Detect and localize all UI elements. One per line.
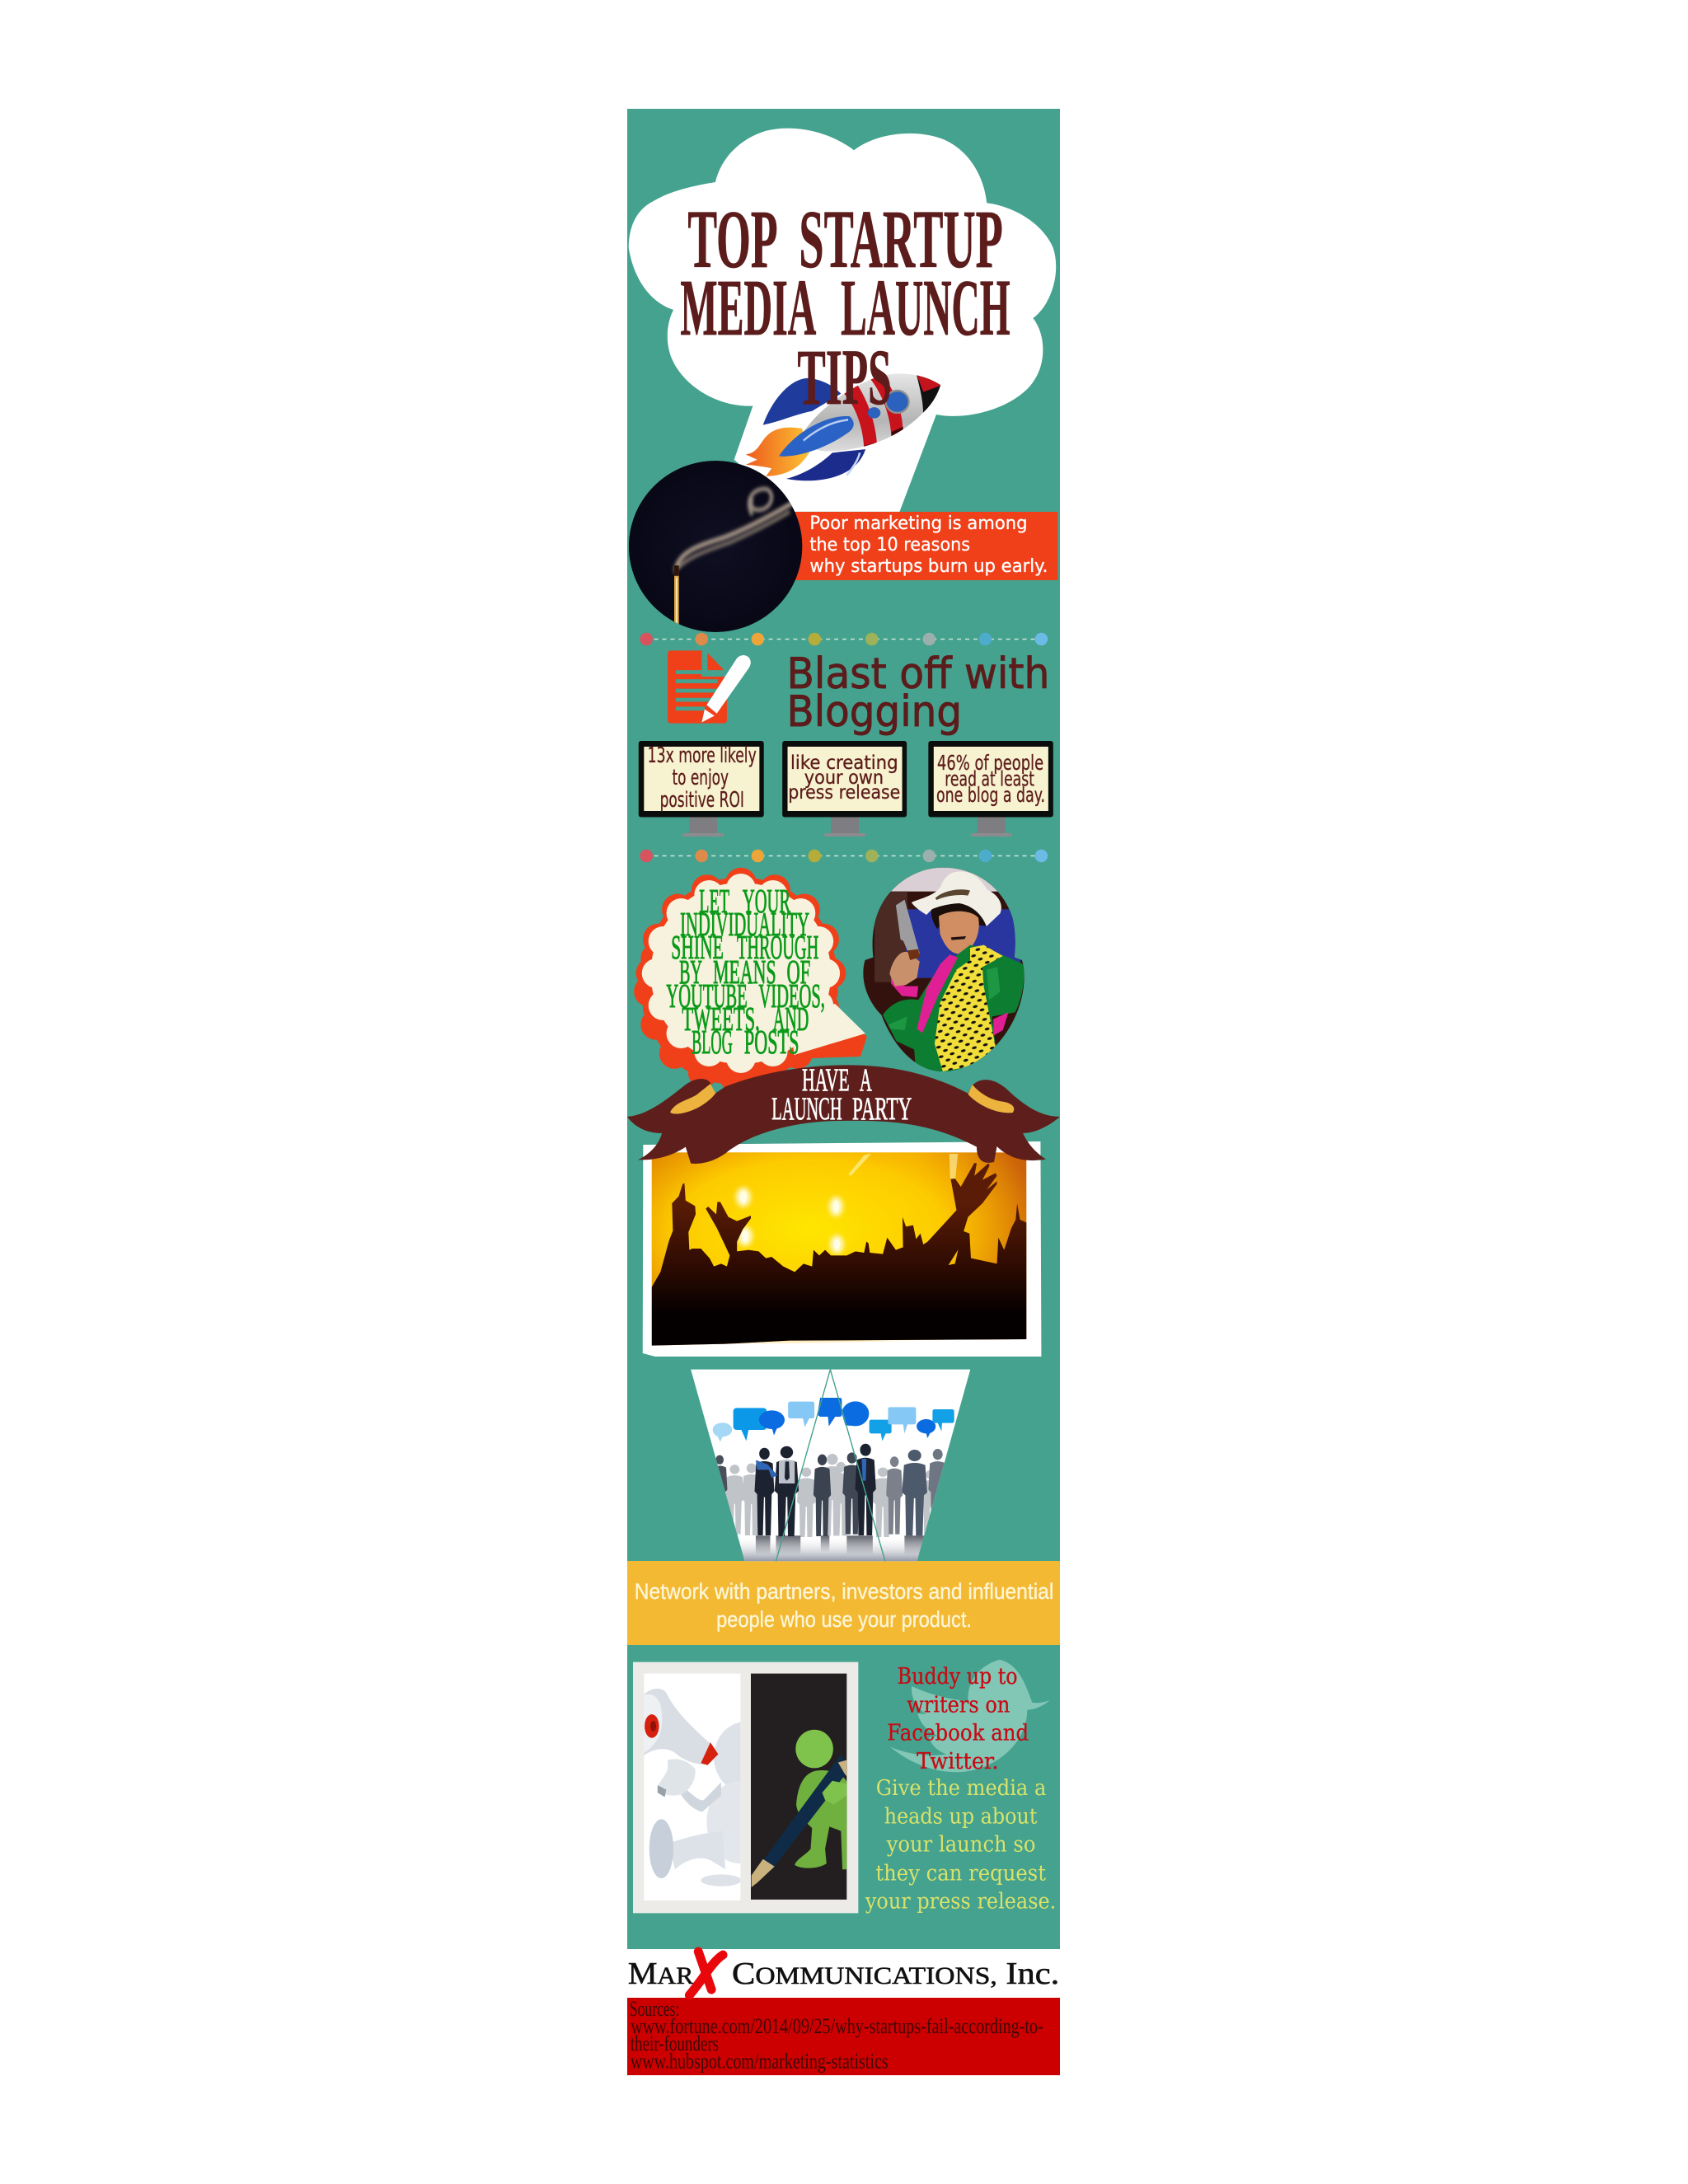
monitor: 13x more likely: positive ROI: [660, 788, 744, 813]
divider: dotted row two: [640, 850, 1048, 862]
monitor: 46% of people: 46% of people: [937, 751, 1043, 775]
speech bubble: let your individuality: YOUR: [743, 883, 790, 920]
text: give the media a heads up: they can request: [875, 1861, 1047, 1886]
monitor: like creating your own press release: like creating: [790, 752, 898, 774]
logo: marx communications: COMMUNICATIONS, Inc.: [732, 1957, 1059, 1991]
foreground people dark: [715, 1455, 727, 1492]
photo: cowboy portrait: [863, 867, 1025, 1071]
speech bubble: let your individuality: POSTS: [744, 1024, 799, 1061]
ribbon: have a launch party: LAUNCH: [771, 1091, 842, 1127]
heading: blast off with blogging: Blogging: [787, 687, 962, 737]
speech bubble: let your individuality: INDIVIDUALITY: [680, 906, 809, 943]
callout: poor marketing red box: Poor marketing is among: [809, 513, 1028, 534]
speech bubble: let your individuality: LET: [699, 883, 729, 920]
text: network with partners: Network with partners, investors and influential: [635, 1579, 1053, 1604]
text: sources: www.hubspot.com/marketing-statistics: [631, 2049, 889, 2074]
text: sources: [630, 1997, 1043, 2074]
title: STARTUP: [799, 193, 1003, 285]
text: buddy up to writers: Facebook and: [887, 1720, 1029, 1746]
title: MEDIA: [680, 264, 816, 353]
page content: LAUNCH: [841, 264, 1010, 353]
ribbon: have a launch party: PARTY: [852, 1091, 912, 1127]
illustration: green figure with pen: [752, 1730, 850, 1887]
icon: twitter bird watermark: [890, 1660, 1049, 1772]
icon: document and pencil: [668, 650, 751, 724]
title: TIPS: [797, 334, 892, 421]
monitor: 46% of people: [928, 741, 1053, 837]
band: network yellow background: [627, 1561, 1060, 1645]
logo: marx communications: MAR: [628, 1957, 693, 1991]
monitor: 46% of people: one blog a day.: [936, 783, 1045, 807]
text: give the media a heads up: Give the media a: [876, 1776, 1046, 1801]
heading: blast off with blogging: Blast off with: [787, 649, 1049, 699]
page content: [627, 129, 1060, 2074]
speech bubble: let your individuality: VIDEOS,: [758, 977, 825, 1015]
monitor: 13x more likely: [639, 741, 764, 837]
title: TOP: [687, 193, 778, 285]
text: buddy up to writers: [887, 1664, 1029, 1774]
text: buddy up to writers: Buddy up to: [898, 1664, 1018, 1690]
speech bubble: let your individuality: TWEETS,: [682, 1001, 760, 1038]
speech bubble: let your individuality: [634, 868, 867, 1094]
speech bubble: let your individuality: BLOG: [692, 1024, 733, 1061]
text: sources: www.fortune.com/2014/09/25/why-startups-fail-according-to-: [631, 2014, 1043, 2038]
text: give the media a heads up: your launch so: [886, 1832, 1035, 1858]
text: sources: Sources:: [630, 1997, 679, 2021]
photo: concert crowd in white frame: [643, 1141, 1041, 1357]
speech bubble: let your individuality: OF: [787, 954, 810, 991]
ribbon: have a launch party: A: [860, 1062, 872, 1098]
monitor: like creating your own press release: your own: [804, 767, 884, 789]
callout: poor marketing red box: why startups burn up early.: [809, 556, 1048, 577]
text: give the media a heads up: heads up about: [884, 1804, 1038, 1830]
text: give the media a heads up: [865, 1776, 1056, 1915]
speech bubble: let your individuality: BY: [679, 954, 702, 991]
ribbon: have a launch party: [627, 1062, 1060, 1164]
text: buddy up to writers: writers on: [907, 1692, 1010, 1718]
callout: poor marketing red box: the top 10 reasons: [809, 535, 970, 555]
panel: sources red background: [627, 1998, 1060, 2075]
title: [680, 193, 1010, 421]
text: give the media a heads up: your press release.: [865, 1889, 1056, 1915]
monitor: like creating your own press release: [782, 741, 907, 837]
speech bubble: let your individuality: THROUGH: [737, 929, 818, 966]
monitor: like creating your own press release: press release: [788, 782, 900, 804]
reflections: [739, 1543, 921, 1561]
background people grey: [725, 1454, 940, 1537]
monitor: 46% of people: read at least: [945, 766, 1034, 791]
panel: teal background: [627, 109, 1060, 1949]
illustration: megaphone figure: [645, 1689, 740, 1886]
icon: rocket: [746, 373, 942, 480]
monitor: 13x more likely: 13x more likely: [648, 743, 757, 768]
logo: marx communications: [628, 1952, 1059, 1995]
speech bubbles: [713, 1398, 954, 1441]
speech bubble: let your individuality: SHINE: [671, 929, 724, 966]
speech bubble: let your individuality: MEANS: [713, 954, 776, 991]
text: network with partners: people who use your product.: [716, 1607, 972, 1632]
speech bubble: let your individuality: AND: [773, 1001, 809, 1038]
text: network with partners: [635, 1579, 1053, 1632]
text: sources: their-founders: [631, 2032, 719, 2055]
text: buddy up to writers: Twitter.: [917, 1749, 998, 1774]
photo: burnt match smoke circle: [629, 461, 802, 632]
speech bubble: let your individuality: YOUTUBE: [666, 977, 748, 1015]
cloud: white title cloud with tail: [629, 129, 1056, 512]
ribbon: have a launch party: HAVE: [802, 1062, 850, 1098]
monitor: 13x more likely: to enjoy: [672, 766, 729, 790]
panel: megaphone and pen photo frame: [633, 1662, 858, 1913]
heading: blast off with blogging: [787, 649, 1049, 737]
divider: dotted row one: [640, 633, 1048, 645]
callout: poor marketing red box: [795, 512, 1057, 580]
photo: networking people in trapezoid: [691, 1370, 970, 1562]
